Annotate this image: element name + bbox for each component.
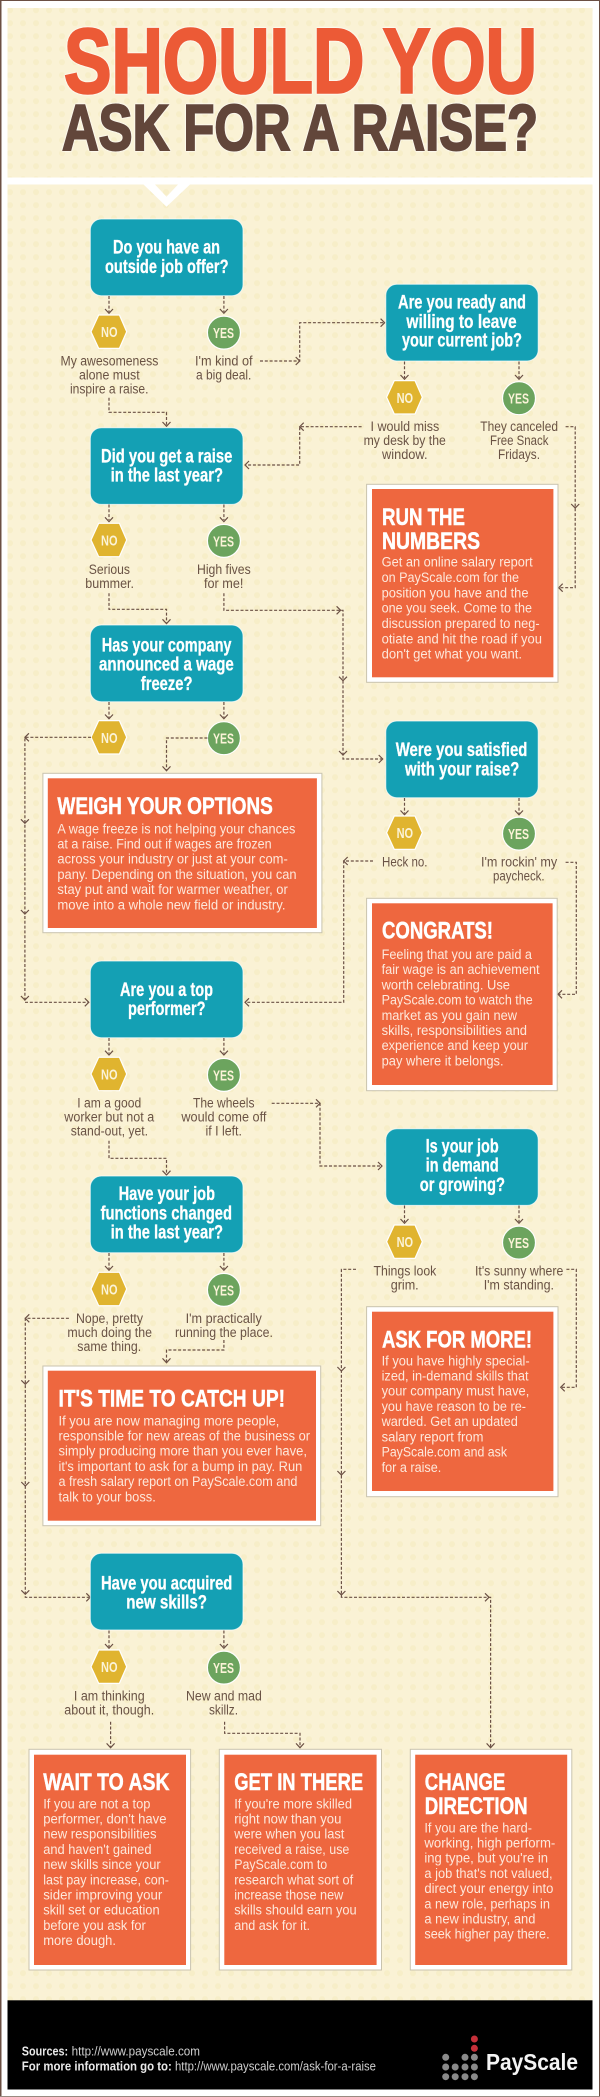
panel: weigh your options bbox=[43, 773, 322, 933]
branch: top performer no: stand-out, yet. bbox=[71, 1124, 148, 1139]
question: acquired new skills bbox=[90, 1553, 243, 1630]
question: wage freeze: freeze? bbox=[141, 674, 192, 695]
panel: wait to ask: If you are not a top bbox=[43, 1796, 150, 1811]
branch: outside job offer no: alone must bbox=[79, 368, 140, 383]
branch: top performer yes: if I left. bbox=[206, 1124, 242, 1139]
branch: acquired skills no bbox=[64, 1630, 154, 1717]
branch: acquired skills yes: skillz. bbox=[209, 1702, 238, 1717]
branch: job in demand no: NO bbox=[397, 1234, 413, 1251]
panel: run the numbers: otiate and hit the road if you bbox=[382, 631, 542, 646]
panel: change direction: a new industry, and bbox=[424, 1912, 535, 1926]
sources text: http://www.payscale.com/ask-for-a-raise bbox=[175, 2060, 376, 2074]
branch: raise no: NO bbox=[101, 532, 118, 550]
panel: time to catch up: If you are now managing more people, bbox=[58, 1413, 279, 1428]
panel: weigh your options: pany. Depending on the situation, you can bbox=[57, 867, 297, 882]
branch: raise no: Serious bbox=[89, 562, 130, 577]
question: wage freeze: Has your company bbox=[102, 636, 232, 657]
question: ready to leave: Are you ready and bbox=[398, 292, 526, 313]
panel: get in there: right now than you bbox=[234, 1812, 341, 1826]
panel: change direction: ing type, but you're in bbox=[424, 1851, 548, 1866]
branch: ready to leave no bbox=[364, 362, 446, 462]
branch: job functions no bbox=[67, 1253, 152, 1354]
question: ready to leave: your current job? bbox=[402, 331, 522, 352]
panel: wait to ask: new responsibilities bbox=[43, 1827, 157, 1842]
arrow: yes to ready to leave bbox=[260, 319, 385, 365]
question: top performer: performer? bbox=[128, 999, 206, 1020]
branch: job functions no: NO bbox=[101, 1282, 118, 1298]
panel: ask for more: ized, in-demand skills that bbox=[382, 1368, 529, 1384]
panel: time to catch up: responsible for new areas of the business or bbox=[58, 1428, 310, 1444]
footer bbox=[8, 2000, 592, 2090]
question: ready to leave bbox=[386, 284, 538, 361]
panel: change direction: a job that's not valued, bbox=[424, 1866, 553, 1881]
panel: run the numbers: one you seek. Come to the bbox=[382, 601, 532, 616]
arrow: high fives to satisfied bbox=[224, 593, 383, 763]
panel: wait to ask: sider improving your bbox=[43, 1888, 163, 1902]
branch: outside job offer yes: a big deal. bbox=[196, 368, 251, 383]
panel: wait to ask: WAIT TO ASK bbox=[43, 1769, 170, 1796]
panel: congrats: experience and keep your bbox=[382, 1038, 528, 1053]
panel: congrats: worth celebrating. Use bbox=[381, 977, 510, 992]
panel: time to catch up: IT'S TIME TO CATCH UP! bbox=[58, 1386, 285, 1413]
branch: top performer yes bbox=[180, 1038, 267, 1139]
branch: wage freeze yes bbox=[207, 702, 240, 755]
arrow: things look grim to change direction bbox=[337, 1269, 495, 1748]
panel: change direction: a new role, perhaps in bbox=[424, 1896, 550, 1911]
panel: time to catch up: it's important to ask for a bump in pay. Run bbox=[58, 1459, 302, 1474]
branch: outside job offer no: My awesomeness bbox=[60, 354, 159, 369]
question: outside job offer: outside job offer? bbox=[105, 257, 228, 278]
question: satisfied with raise: Were you satisfied bbox=[396, 740, 527, 761]
question: raise in last year bbox=[90, 428, 243, 504]
panel: wait to ask: skill set or education bbox=[43, 1903, 160, 1918]
branch: top performer no: NO bbox=[101, 1066, 118, 1084]
question: raise in last year: Did you get a raise bbox=[101, 447, 232, 468]
sources text: http://www.payscale.com bbox=[72, 2045, 200, 2059]
panel: ask for more: salary report from bbox=[382, 1429, 483, 1444]
panel: wait to ask: more dough. bbox=[43, 1933, 116, 1948]
question: top performer: Are you a top bbox=[120, 980, 213, 1001]
branch: acquired skills no: I am thinking bbox=[74, 1688, 145, 1703]
panel: get in there: research what sort of bbox=[234, 1872, 353, 1887]
panel: change direction: If you are the hard- bbox=[424, 1820, 532, 1835]
branch: outside job offer yes: YES bbox=[213, 325, 234, 342]
branch: job functions no: same thing. bbox=[77, 1339, 141, 1354]
branch: top performer no bbox=[63, 1038, 155, 1139]
branch: job in demand no: grim. bbox=[391, 1277, 419, 1292]
question: job in demand bbox=[386, 1129, 538, 1205]
arrow: miss desk to raise question bbox=[245, 423, 362, 469]
panel: change direction: seek higher pay there. bbox=[424, 1927, 550, 1942]
branch: job in demand no bbox=[374, 1206, 437, 1292]
branch: job functions no: much doing the bbox=[67, 1325, 152, 1340]
question: ready to leave: willing to leave bbox=[406, 312, 517, 333]
panel: wait to ask: new skills since your bbox=[43, 1857, 161, 1872]
sources text: Sources: bbox=[22, 2045, 68, 2059]
branch: acquired skills yes: New and mad bbox=[186, 1688, 262, 1703]
panel: get in there: and ask for it. bbox=[234, 1918, 310, 1933]
branch: top performer yes: YES bbox=[213, 1067, 234, 1084]
panel: change direction: working, high perform- bbox=[423, 1836, 555, 1850]
branch: raise no bbox=[85, 504, 134, 591]
panel: get in there bbox=[219, 1749, 382, 1970]
arrow: thinking to wait to ask bbox=[107, 1722, 115, 1748]
branch: outside job offer no bbox=[60, 296, 159, 397]
arrow: sunny to ask for more bbox=[561, 1269, 576, 1391]
branch: satisfied yes: YES bbox=[508, 826, 529, 843]
branch: satisfied no: NO bbox=[397, 825, 413, 842]
arrow: freeze no to top performer bbox=[21, 733, 91, 1006]
panel: congrats: PayScale.com to watch the bbox=[382, 993, 533, 1008]
branch: satisfied yes: I'm rockin' my bbox=[481, 855, 557, 870]
branch: outside job offer yes: I'm kind of bbox=[195, 354, 253, 369]
panel: ask for more: If you have highly special- bbox=[382, 1353, 530, 1368]
panel: get in there: GET IN THERE bbox=[234, 1769, 363, 1796]
panel: weigh your options: at a raise. Find out if wages are frozen bbox=[57, 836, 272, 852]
branch: top performer no: worker but not a bbox=[63, 1110, 155, 1125]
panel: time to catch up bbox=[43, 1366, 321, 1526]
arrow: bummer to wage freeze bbox=[109, 593, 170, 624]
branch: ready to leave yes: Fridays. bbox=[498, 447, 540, 462]
panel: change direction: DIRECTION bbox=[425, 1793, 528, 1820]
branch: acquired skills yes: YES bbox=[213, 1660, 234, 1677]
panel: weigh your options: WEIGH YOUR OPTIONS bbox=[57, 793, 273, 820]
panel: wait to ask: before you ask for bbox=[43, 1918, 146, 1933]
panel: run the numbers: Get an online salary report bbox=[382, 555, 533, 570]
branch: raise no: bummer. bbox=[85, 576, 134, 591]
panel: time to catch up: talk to your boss. bbox=[58, 1489, 156, 1504]
sources text: For more information go to: bbox=[22, 2060, 172, 2074]
panel: congrats: pay where it belongs. bbox=[382, 1054, 504, 1068]
panel: congrats: Feeling that you are paid a bbox=[382, 947, 532, 962]
branch: ready to leave yes: YES bbox=[508, 391, 529, 408]
arrow: running the place to catch up bbox=[162, 1340, 224, 1363]
panel: get in there: received a raise, use bbox=[234, 1842, 349, 1857]
panel: change direction bbox=[410, 1749, 572, 1970]
panel: get in there: were when you last bbox=[233, 1827, 345, 1842]
arrow: no to raise question bbox=[109, 398, 170, 426]
panel: run the numbers: discussion prepared to neg- bbox=[382, 616, 540, 631]
branch: satisfied yes: paycheck. bbox=[493, 869, 545, 884]
branch: acquired skills no: NO bbox=[101, 1659, 118, 1676]
panel: run the numbers: RUN THE bbox=[382, 504, 465, 531]
sources text bbox=[22, 2045, 376, 2074]
branch: acquired skills no: about it, though. bbox=[64, 1702, 154, 1717]
branch: outside job offer no: NO bbox=[101, 324, 118, 341]
panel: wait to ask: and haven't gained bbox=[43, 1842, 152, 1857]
panel: ask for more: ASK FOR MORE! bbox=[382, 1326, 532, 1353]
question: job in demand: Is your job bbox=[426, 1136, 499, 1157]
panel: run the numbers bbox=[367, 484, 558, 682]
branch: job functions yes: running the place. bbox=[175, 1325, 273, 1340]
panel: ask for more: your company must have, bbox=[382, 1384, 529, 1399]
branch: job functions no: Nope, pretty bbox=[76, 1311, 143, 1326]
arrow: rockin to congrats bbox=[558, 862, 576, 998]
panel: run the numbers: on PayScale.com for the bbox=[382, 570, 519, 585]
header chevron divider bbox=[144, 184, 190, 207]
question: acquired new skills: new skills? bbox=[126, 1593, 207, 1614]
branch: outside job offer no: inspire a raise. bbox=[70, 382, 148, 397]
question: job functions changed bbox=[90, 1176, 243, 1253]
branch: top performer yes: The wheels bbox=[193, 1096, 255, 1111]
question: wage freeze: announced a wage bbox=[99, 655, 234, 676]
branch: satisfied no bbox=[382, 798, 428, 870]
panel: change direction: CHANGE bbox=[425, 1769, 505, 1796]
panel: get in there: If you're more skilled bbox=[234, 1796, 352, 1811]
panel: ask for more bbox=[367, 1307, 558, 1497]
panel: weigh your options: move into a whole new field or industry. bbox=[57, 897, 286, 912]
arrow: nope to acquired skills bbox=[21, 1314, 90, 1601]
panel: congrats: CONGRATS! bbox=[382, 917, 493, 944]
question: raise in last year: in the last year? bbox=[111, 466, 223, 487]
panel: ask for more: for a raise. bbox=[382, 1460, 441, 1475]
branch: ready to leave yes: They canceled bbox=[480, 419, 558, 434]
panel: run the numbers: don't get what you want. bbox=[382, 647, 522, 662]
question: job functions changed: Have your job bbox=[119, 1184, 215, 1205]
branch: job in demand yes: YES bbox=[508, 1235, 529, 1252]
panel: get in there: PayScale.com to bbox=[234, 1857, 327, 1872]
branch: job in demand yes bbox=[475, 1206, 563, 1292]
panel: weigh your options: across your industry or just at your com- bbox=[57, 852, 288, 867]
branch: job functions yes: I'm practically bbox=[186, 1311, 262, 1326]
question: job functions changed: in the last year? bbox=[111, 1223, 223, 1244]
panel: congrats: fair wage is an achievement bbox=[382, 962, 540, 977]
branch: ready to leave no: NO bbox=[397, 390, 413, 407]
branch: wage freeze no: NO bbox=[101, 730, 118, 747]
panel: weigh your options: A wage freeze is not helping your chances bbox=[57, 821, 296, 836]
panel: get in there: increase those new bbox=[234, 1888, 344, 1902]
branch: job in demand yes: I'm standing. bbox=[484, 1277, 554, 1292]
panel: change direction: direct your energy into bbox=[424, 1881, 553, 1896]
arrow: wheels to job in demand bbox=[272, 1099, 382, 1170]
branch: ready to leave yes: Free Snack bbox=[490, 433, 549, 448]
panel: congrats: market as you gain new bbox=[382, 1008, 517, 1023]
question: job functions changed: functions changed bbox=[101, 1203, 232, 1224]
branch: raise yes: High fives bbox=[197, 562, 251, 577]
branch: job functions yes: YES bbox=[213, 1282, 234, 1299]
arrow: good worker to job functions bbox=[109, 1141, 170, 1175]
branch: raise yes bbox=[197, 504, 251, 591]
arrow: snack fridays to run the numbers bbox=[559, 427, 579, 592]
question: satisfied with raise: with your raise? bbox=[404, 760, 519, 781]
logo: PayScale bbox=[442, 2036, 578, 2080]
arrow: skillz to get in there bbox=[225, 1722, 304, 1748]
panel: congrats bbox=[367, 898, 557, 1091]
branch: wage freeze no bbox=[91, 702, 127, 754]
branch: ready to leave no: I would miss bbox=[370, 419, 440, 434]
question: outside job offer bbox=[90, 219, 243, 296]
branch: ready to leave no: window. bbox=[381, 447, 428, 462]
branch: outside job offer yes bbox=[195, 296, 253, 383]
branch: raise yes: for me! bbox=[204, 576, 243, 591]
panel: wait to ask: performer, don't have bbox=[43, 1812, 167, 1826]
branch: top performer yes: would come off bbox=[180, 1110, 267, 1125]
logo: PayScale: PayScale bbox=[486, 2049, 578, 2075]
panel: get in there: skills should earn you bbox=[234, 1903, 357, 1918]
branch: job in demand yes: It's sunny where bbox=[475, 1263, 563, 1278]
question: job in demand: in demand bbox=[426, 1156, 499, 1177]
branch: job in demand no: Things look bbox=[374, 1263, 437, 1278]
panel: wait to ask: last pay increase, con- bbox=[43, 1872, 169, 1887]
panel: wait to ask bbox=[29, 1749, 191, 1970]
branch: satisfied no: Heck no. bbox=[382, 855, 428, 870]
question: outside job offer: Do you have an bbox=[113, 237, 220, 258]
question: top performer bbox=[90, 961, 243, 1038]
branch: ready to leave no: my desk by the bbox=[364, 433, 446, 448]
panel: weigh your options: stay put and wait for warmer weather, or bbox=[57, 882, 288, 897]
branch: job functions yes bbox=[175, 1253, 273, 1340]
question: satisfied with raise bbox=[386, 721, 538, 798]
panel: time to catch up: simply producing more than you ever have, bbox=[58, 1444, 307, 1459]
arrow: freeze yes to weigh your options bbox=[162, 738, 207, 771]
panel: run the numbers: position you have and the bbox=[382, 585, 528, 600]
panel: congrats: skills, responsibilities and bbox=[382, 1023, 527, 1038]
question: wage freeze bbox=[90, 625, 243, 702]
question: acquired new skills: Have you acquired bbox=[101, 1573, 232, 1594]
panel: ask for more: warded. Get an updated bbox=[381, 1414, 518, 1429]
question: job in demand: or growing? bbox=[420, 1175, 505, 1196]
panel: ask for more: PayScale.com and ask bbox=[382, 1444, 507, 1460]
branch: raise yes: YES bbox=[213, 533, 234, 550]
panel: run the numbers: NUMBERS bbox=[382, 528, 480, 555]
title bbox=[62, 10, 538, 164]
panel: ask for more: you have reason to be re- bbox=[382, 1399, 526, 1414]
branch: ready to leave yes bbox=[480, 362, 558, 462]
branch: satisfied yes bbox=[481, 798, 557, 884]
arrow: heck no to top performer bbox=[245, 857, 373, 1006]
branch: wage freeze yes: YES bbox=[213, 731, 234, 748]
panel: time to catch up: a fresh salary report on PayScale.com and bbox=[58, 1474, 297, 1489]
branch: acquired skills yes bbox=[186, 1630, 262, 1717]
branch: top performer no: I am a good bbox=[77, 1096, 141, 1111]
